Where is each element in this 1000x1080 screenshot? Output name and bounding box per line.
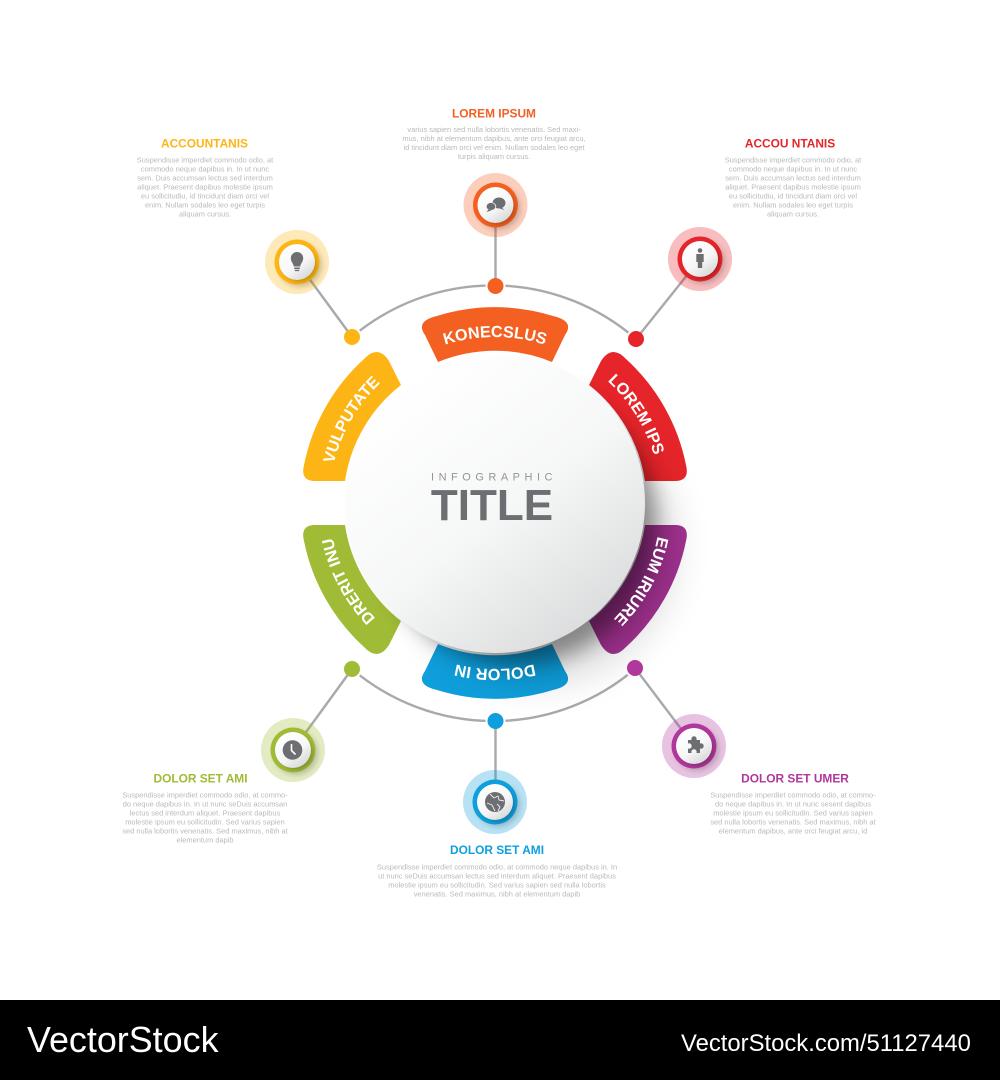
- text: dolor set umer: do neque dapibus in. In ut nunc sesent dapibus: [715, 800, 871, 808]
- text: dolor set umer: Suspendisse imperdiet commodo odio, at commo-: [710, 790, 876, 800]
- watermark band: VectorStock.com/51127440: [681, 1030, 971, 1057]
- icon: speech bubbles: [486, 198, 506, 212]
- node: dolor set ami green icon: [261, 718, 325, 782]
- label: drerit inu: DRERIT INU: [322, 539, 375, 625]
- central circle shadow: [376, 384, 673, 681]
- text: accountanis: enim. Nullam sodales leo eget turpis: [145, 200, 265, 210]
- text: dolor set ami green: [122, 772, 289, 844]
- watermark band: [0, 1000, 1000, 1080]
- text: dolor set ami blue: venenatis. Sed maximus, nibh at elementum dapib: [414, 890, 580, 898]
- text: dolor set ami blue: ut nunc seDuis accumsan lectus sed interdum aliquet. Praesent dapibus: [378, 872, 616, 880]
- text: accou ntanis: ACCOU NTANIS: [745, 136, 835, 150]
- text: dolor set ami blue: [377, 843, 617, 898]
- main connector arcs: [352, 285, 636, 721]
- icon: puzzle piece: [688, 736, 704, 753]
- text: dolor set ami green: elementum dapib: [176, 836, 234, 844]
- text: dolor set umer: DOLOR SET UMER: [741, 772, 849, 786]
- icon: clock: [283, 740, 302, 760]
- text: accou ntanis: Suspendisse imperdiet commodo odio, at: [725, 156, 862, 164]
- text: dolor set umer: molestie ipsum eu sollicitudin. Sed varius sapien: [713, 808, 873, 818]
- segment: vulputate: [303, 352, 401, 481]
- label: lorem ips: LOREM IPS: [608, 374, 664, 454]
- central circle: [345, 353, 645, 653]
- text: accountanis: sem. Duis accumsan lectus sed interdum: [137, 174, 273, 182]
- connector dots: [344, 278, 644, 729]
- label: konecslus: KONECSLUS: [442, 326, 546, 344]
- text: lorem ipsum: turpis aliquam cursus.: [458, 152, 530, 161]
- text: accou ntanis: [725, 136, 862, 218]
- icon: person: [696, 248, 704, 268]
- text: accountanis: eu sollicitudiu, id tincidunt diam orci vel: [141, 192, 269, 200]
- text: accou ntanis: sem. Duis accumsan lectus sed interdum: [725, 174, 861, 182]
- dot clearances on arcs: [342, 276, 646, 731]
- text: accou ntanis: aliquam cursus.: [767, 210, 819, 218]
- text: dolor set umer: sed nulla lobortis venenatis. Sed maximus, nibh at: [710, 818, 877, 826]
- text: accountanis: commodo neque dapibus in. In ut nunc: [141, 164, 269, 174]
- icon: light bulb: [291, 252, 303, 271]
- segment: lorem ips: [589, 352, 687, 481]
- text: lorem ipsum: mus, nibh at elementum dapibus, ante orci feugiat arcu,: [402, 134, 586, 143]
- label: vulputate: VULPUTATE: [322, 376, 380, 461]
- node: lorem ipsum icon: [464, 173, 528, 237]
- segment: konecslus: [422, 307, 568, 362]
- text: accountanis: [137, 136, 274, 218]
- text: dolor set umer: elementum dapibus, ante orci feugiat arcu, id: [719, 826, 867, 836]
- title: INFOGRAPHIC: [431, 472, 557, 484]
- text: dolor set ami green: lectus sed interdum aliquet. Praesent dapibus: [130, 808, 281, 818]
- segment labels: [322, 326, 668, 680]
- text: dolor set ami blue: molestie ipsum eu sollicitudin. Sed varius sapien sed nulla lobortis: [388, 880, 606, 890]
- text: accountanis: Suspendisse imperdiet commodo odio, at: [137, 156, 274, 164]
- segment: drerit inu: [303, 525, 401, 654]
- text: lorem ipsum: id tincidunt diam orci vel enim. Nullam sodales leo eget: [403, 143, 585, 152]
- text: dolor set ami blue: DOLOR SET AMI: [450, 843, 544, 857]
- node: dolor set umer icon: [662, 714, 726, 778]
- node: accou ntanis icon: [668, 227, 732, 291]
- text: accou ntanis: commodo neque dapibus in. In ut nunc: [729, 164, 857, 174]
- text: dolor set ami green: molestie ipsum eu sollicitudin. Sed varius sapien: [125, 818, 285, 826]
- label: dolor in: DOLOR IN: [454, 664, 536, 680]
- text: accountanis: aliquet. Praesent dapibus molestie ipsum: [137, 182, 273, 192]
- text: accountanis: aliquam cursus.: [179, 210, 231, 218]
- label: eum iriure: EUM IRIURE: [614, 537, 668, 626]
- text: lorem ipsum: varius sapien sed nulla lobortis venenatis. Sed maxi-: [407, 125, 581, 134]
- segment: eum iriure: [589, 525, 687, 654]
- text: dolor set ami green: sed nulla lobortis venenatis. Sed maximus, nibh at: [122, 826, 289, 836]
- text: lorem ipsum: [402, 106, 586, 161]
- text: dolor set umer: [710, 772, 877, 836]
- connector lines: [293, 205, 700, 802]
- icon: globe: [485, 792, 505, 812]
- text: accou ntanis: eu sollicitudiu, id tincidunt diam orci vel: [729, 192, 857, 200]
- node: accountanis icon: [265, 230, 329, 294]
- text: lorem ipsum: LOREM IPSUM: [452, 106, 536, 120]
- node: dolor set ami blue icon: [463, 770, 527, 834]
- text: accou ntanis: aliquet. Praesent dapibus molestie ipsum: [725, 182, 861, 192]
- text: dolor set ami green: Suspendisse imperdiet commodo odio, at commo-: [122, 790, 288, 800]
- text: dolor set ami green: DOLOR SET AMI: [153, 772, 248, 786]
- text: accountanis: ACCOUNTANIS: [161, 136, 248, 150]
- watermark band: VectorStock: [27, 1020, 219, 1060]
- segment: dolor in: [422, 644, 568, 699]
- text: dolor set ami blue: Suspendisse imperdiet commodo odio, at commodo neque dapibus in. In: [377, 862, 617, 872]
- title: TITLE: [431, 481, 553, 530]
- text: accou ntanis: enim. Nullam sodales leo eget turpis: [733, 200, 853, 210]
- text: dolor set ami green: do neque dapibus in. In ut nunc seDuis accumsan: [123, 800, 287, 808]
